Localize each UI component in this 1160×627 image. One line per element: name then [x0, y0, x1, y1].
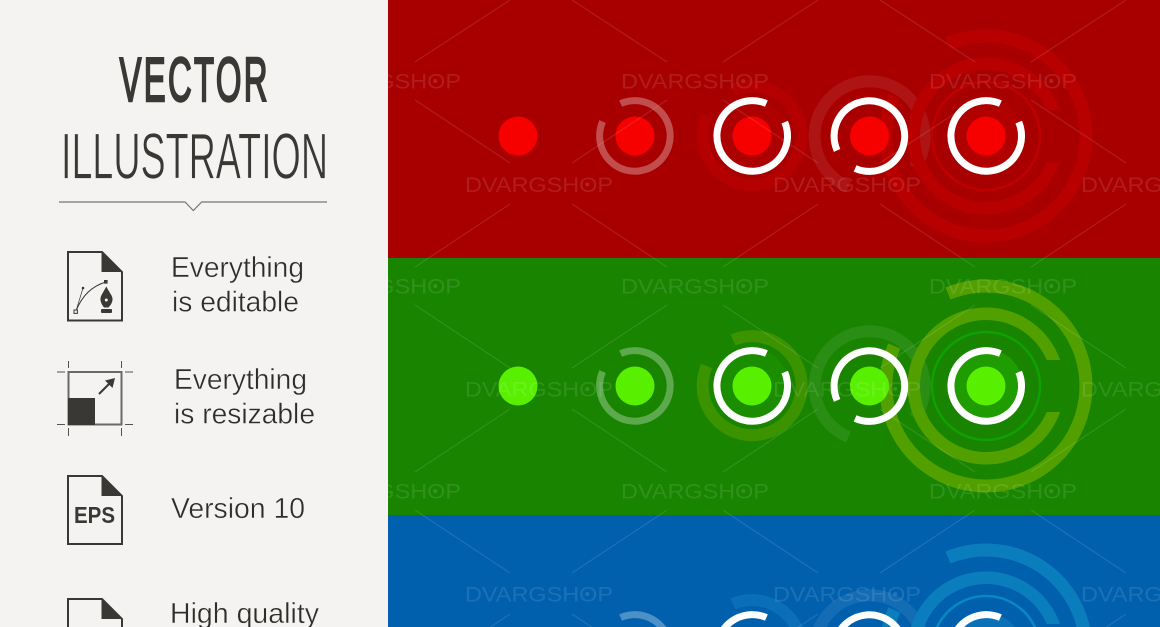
blue signal rings	[600, 615, 1022, 627]
icon: resize square	[57, 361, 133, 436]
watermark overlay	[313, 0, 1160, 627]
watermark overlay: DVARGSHOP	[929, 274, 1077, 298]
panel: red variant	[388, 0, 1160, 258]
feature: everything is editable	[68, 251, 304, 320]
red concentric halos	[703, 36, 1086, 236]
icon: document	[68, 598, 122, 627]
watermark overlay: DVARGSHOP	[773, 173, 921, 197]
feature: version 10	[68, 475, 305, 544]
blue concentric halos	[703, 550, 1086, 627]
label: everything is editable	[171, 252, 304, 318]
panel: blue variant	[388, 515, 1160, 627]
watermark overlay: DVARGSHOP	[621, 70, 769, 94]
green signal markers	[498, 351, 1022, 421]
label: everything is editable: Everything	[171, 252, 304, 284]
watermark overlay: DVARGSHOP	[465, 582, 613, 606]
watermark overlay: DVARGSHOP	[773, 582, 921, 606]
watermark overlay: DVARGSHOP	[465, 378, 613, 402]
watermark overlay: DVARGSHOP	[313, 480, 461, 504]
title: illustration: ILLUSTRATION	[61, 120, 328, 192]
watermark overlay: DVARGSHOP	[929, 480, 1077, 504]
label: everything is resizable	[174, 364, 315, 430]
label: everything is resizable: is resizable	[174, 398, 315, 430]
watermark overlay: DVARGSHOP	[313, 70, 461, 94]
red signal markers	[498, 101, 1022, 171]
feature: everything is resizable	[57, 361, 315, 436]
sidebar panel	[0, 0, 388, 627]
watermark overlay: DVARGSHOP	[621, 480, 769, 504]
label: everything is resizable: Everything	[174, 364, 307, 396]
icon: eps document: EPS	[74, 502, 115, 528]
feature: high quality	[68, 598, 319, 627]
watermark overlay: DVARGSHOP	[313, 274, 461, 298]
title divider with notch	[59, 202, 327, 210]
icon: eps document	[68, 475, 122, 544]
label: version 10: Version 10	[171, 493, 305, 525]
icon: document with pen tool	[68, 251, 122, 320]
watermark overlay: DVARGSHOP	[773, 378, 921, 402]
panel: green variant	[388, 258, 1160, 515]
label: everything is editable: is editable	[172, 286, 299, 318]
title: vector: VECTOR	[120, 45, 270, 115]
watermark overlay: DVARGSHOP	[621, 274, 769, 298]
watermark overlay: DVARGSHOP	[465, 173, 613, 197]
green concentric halos	[703, 286, 1086, 486]
watermark overlay: DVARGSHOP	[929, 70, 1077, 94]
